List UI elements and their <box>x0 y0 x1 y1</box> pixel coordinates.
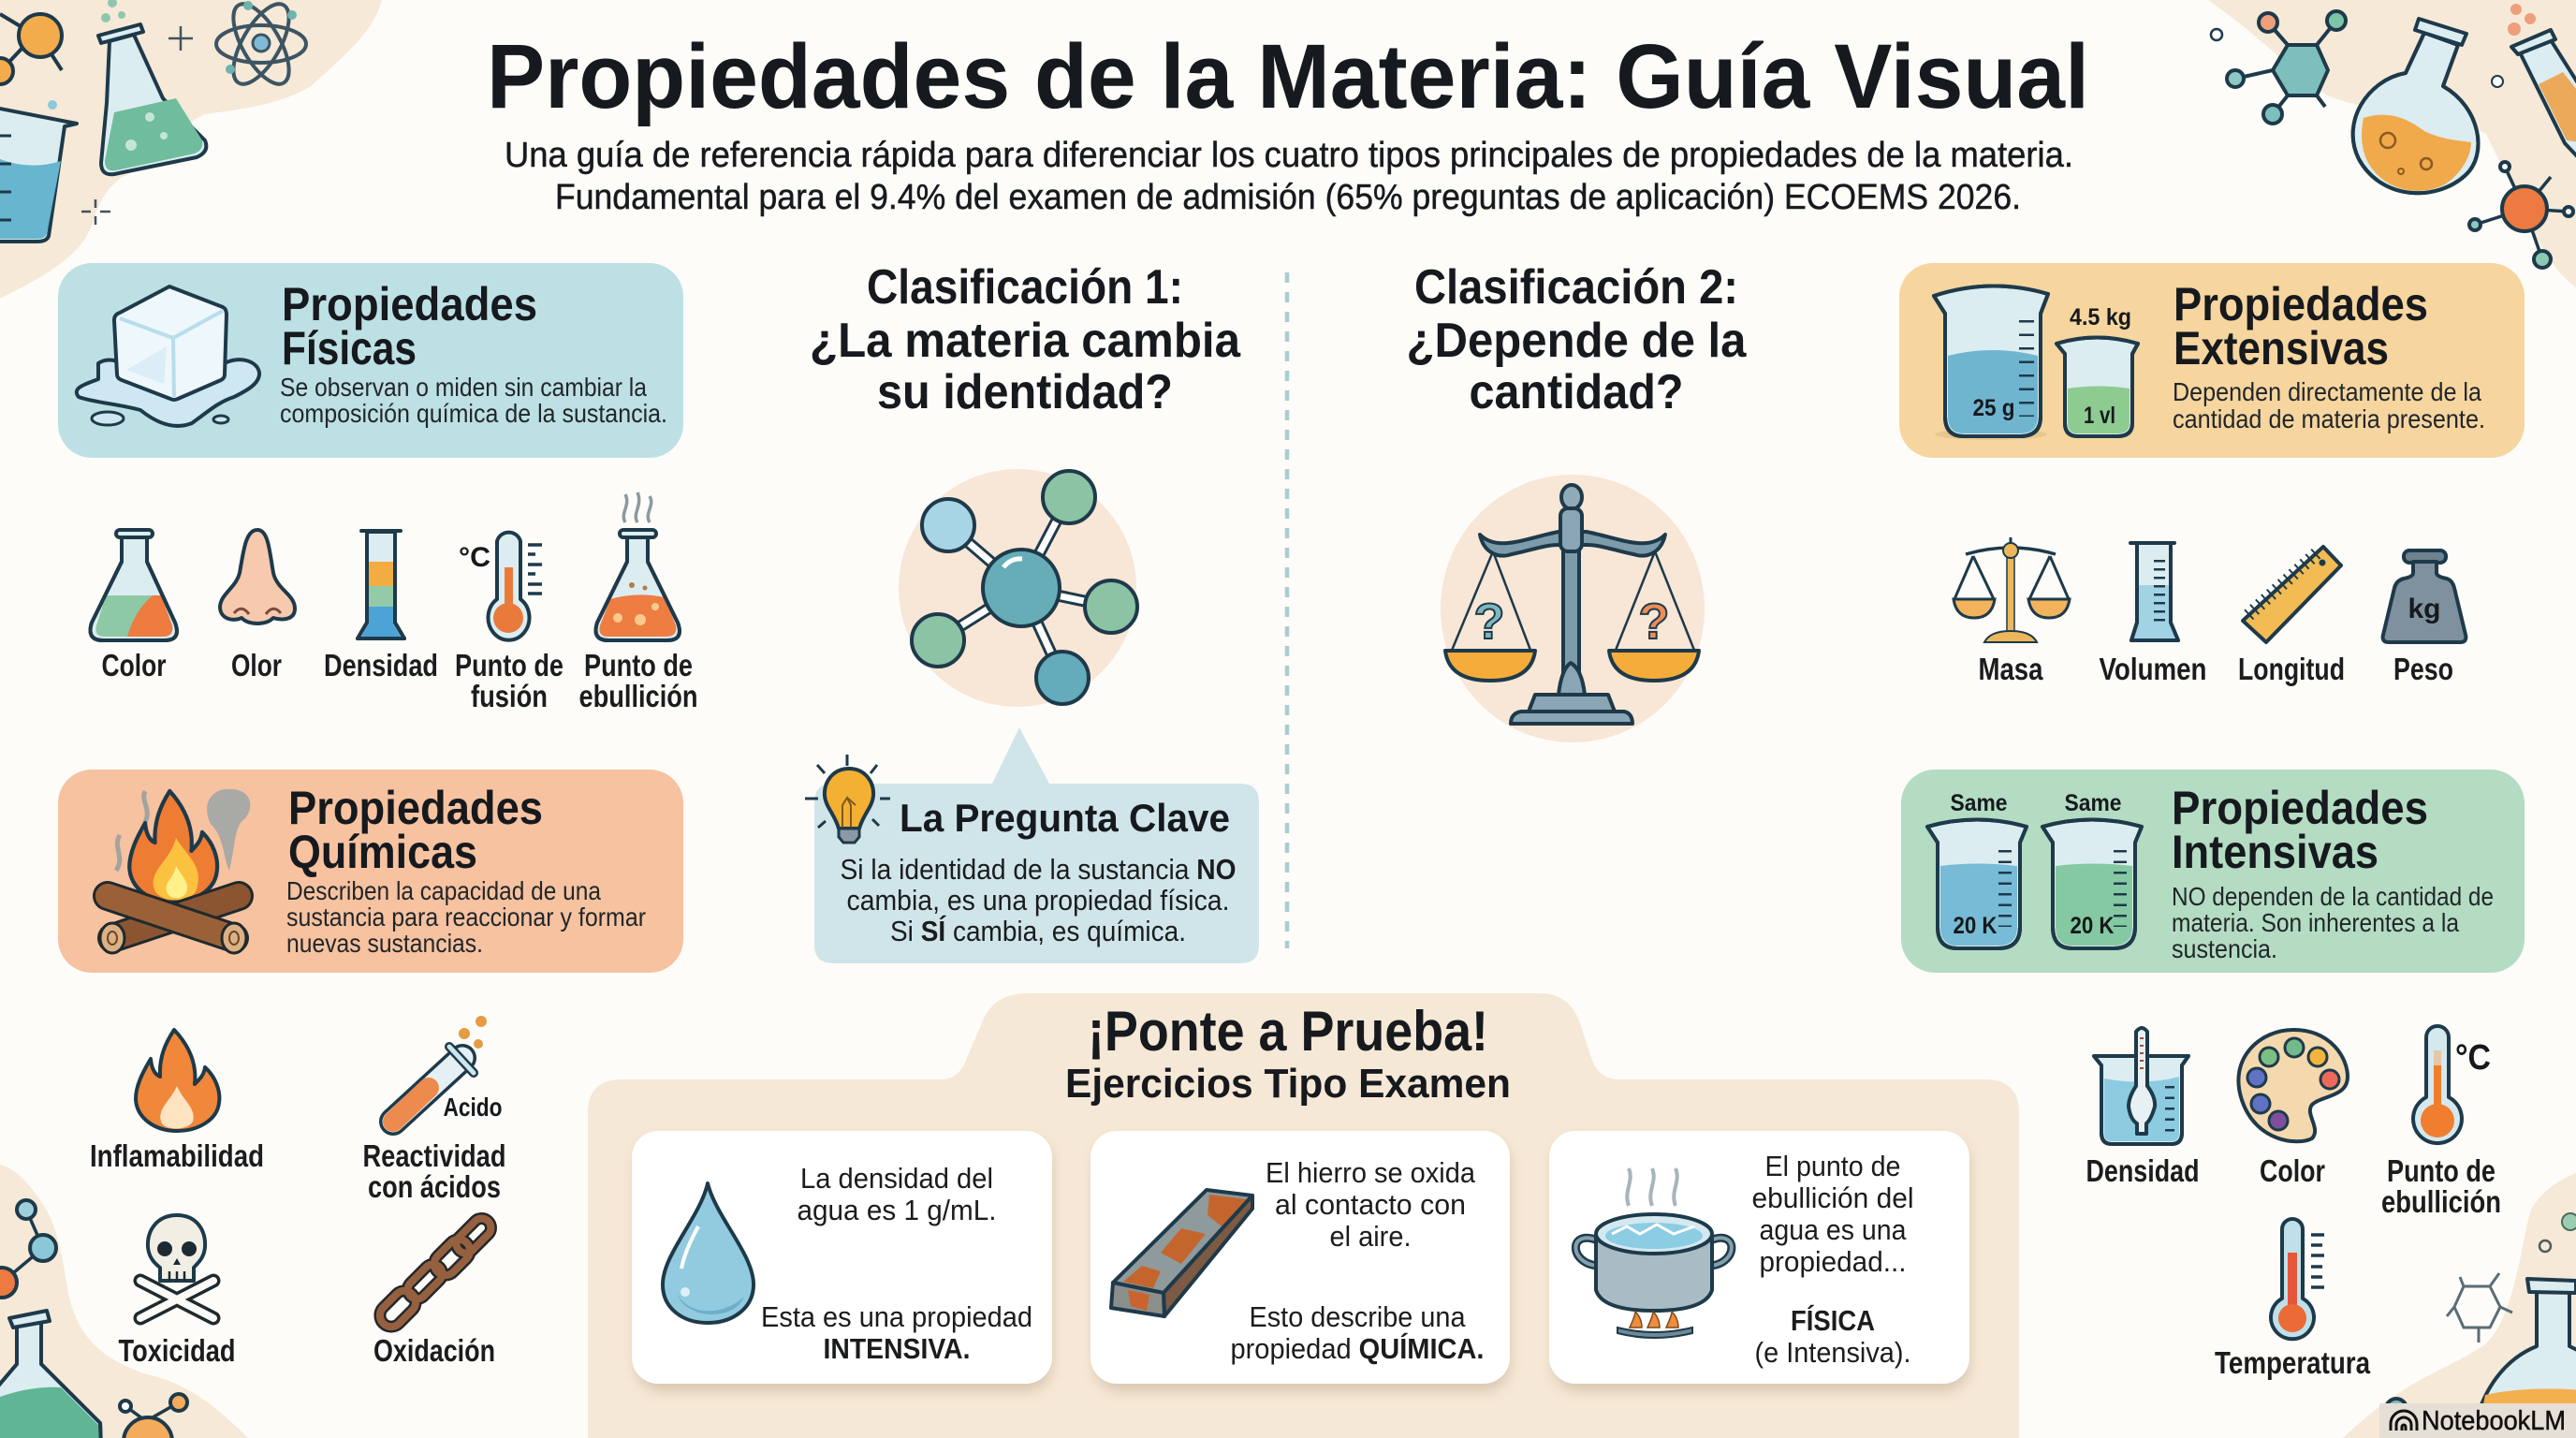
icon: melting point thermometer: Punto de <box>455 648 564 682</box>
icon: mass balance <box>1954 537 2070 686</box>
icon: kilogram weight: kg <box>2408 594 2441 624</box>
icon: color flask <box>90 530 177 682</box>
icon: two beakers at same temperature: Same <box>2065 790 2122 816</box>
card: densidad del agua <box>632 1131 1052 1391</box>
description: Dependen directamente de la <box>2173 377 2481 406</box>
icon: boiling point thermometer: Punto de <box>2387 1153 2496 1188</box>
chemical property examples <box>90 1016 505 1368</box>
classification 2 heading: ¿Depende de la <box>1406 314 1748 368</box>
callout text: Si la identidad de la sustancia NO <box>841 853 1236 886</box>
card: hierro oxidado: Esto describe una <box>1249 1300 1466 1333</box>
icon: melting point thermometer <box>455 533 564 713</box>
subtitle: Fundamental para el 9.4% del examen de admisión (65% preguntas de aplicación) ECOEMS 2026. <box>555 178 2021 217</box>
icon: two beakers at same temperature: Same <box>1951 790 2008 816</box>
description: sustencia. <box>2172 934 2277 963</box>
intensive property examples <box>2086 1026 2501 1380</box>
icon: kilogram weight: Peso <box>2393 652 2453 686</box>
icon: two beakers of different amounts: 1 vl <box>2084 403 2115 429</box>
icon: color flask: Color <box>101 648 167 682</box>
icon: two beakers at same temperature <box>1927 790 2142 948</box>
heading: Extensivas <box>2174 322 2389 374</box>
icon: balance scale: ? <box>1638 594 1670 650</box>
subtitle: Una guía de referencia rápida para diferenciar los cuatro tipos principales de propiedades de la materia. <box>505 136 2073 175</box>
icon: density cylinder <box>324 531 438 682</box>
heading <box>2172 782 2428 878</box>
icon: nose <box>220 530 295 682</box>
description: nuevas sustancias. <box>286 929 483 958</box>
heading: Propiedades <box>2174 278 2428 330</box>
card: densidad del agua: INTENSIVA. <box>824 1332 970 1365</box>
icon: two beakers of different amounts: 4.5 kg <box>2070 304 2131 330</box>
icon: melting point thermometer: °C <box>459 542 490 573</box>
description: Describen la capacidad de una <box>286 876 601 905</box>
card: densidad del agua: La densidad del <box>800 1162 993 1195</box>
icon: skull and crossbones: Toxicidad <box>118 1333 236 1368</box>
physical property examples <box>90 492 698 713</box>
heading: Propiedades <box>288 782 543 834</box>
icon: test tube with acid: con ácidos <box>368 1169 501 1204</box>
heading: Ejercicios Tipo Examen <box>1065 1061 1511 1107</box>
icon: boiling point thermometer: °C <box>2455 1038 2491 1078</box>
description: NO dependen de la cantidad de <box>2172 882 2494 911</box>
card: hierro oxidado: al contacto con <box>1275 1188 1466 1221</box>
description: cantidad de materia presente. <box>2173 404 2485 433</box>
icon: density hydrometer: Densidad <box>2086 1153 2200 1188</box>
description <box>286 876 646 958</box>
description: materia. Son inherentes a la <box>2172 908 2459 937</box>
icon: skull and crossbones <box>118 1215 236 1368</box>
icon: rusty chain: Oxidación <box>373 1333 495 1368</box>
extensive property examples <box>1954 537 2466 686</box>
decoration: bottom-left lab glassware <box>0 1200 187 1438</box>
watermark: NotebookLM: NotebookLM <box>2422 1406 2566 1436</box>
heading: Químicas <box>288 826 477 878</box>
card: punto de ebullición: agua es una <box>1760 1213 1907 1246</box>
panel: ponte a prueba <box>588 993 2019 1438</box>
decoration: bottom-right lab glassware <box>2386 1213 2576 1438</box>
callout: la pregunta clave <box>805 727 1259 963</box>
icon: rusty chain <box>373 1214 495 1368</box>
watermark: NotebookLM <box>2379 1403 2576 1438</box>
icon: density cylinder: Densidad <box>324 648 438 682</box>
icon: flame <box>90 1030 264 1173</box>
panel: propiedades extensivas <box>1899 263 2525 458</box>
icon: boiling flask: ebullición <box>578 679 698 713</box>
classification 1 heading: ¿La materia cambia <box>810 314 1241 368</box>
description: Se observan o miden sin cambiar la <box>280 373 647 402</box>
classification 2 heading <box>1406 260 1748 419</box>
subtitle <box>505 136 2073 217</box>
card: hierro oxidado: propiedad QUÍMICA. <box>1230 1332 1485 1365</box>
card: hierro oxidado: el aire. <box>1329 1220 1412 1253</box>
card: punto de ebullición <box>1549 1131 1969 1391</box>
heading <box>1065 1000 1511 1107</box>
icon: balance scale <box>1441 475 1705 742</box>
icon: two beakers of different amounts: 25 g <box>1973 395 2014 421</box>
description: composición química de la sustancia. <box>280 399 667 428</box>
title: Propiedades de la Materia: Guía Visual <box>487 25 2089 127</box>
card: punto de ebullición: FÍSICA <box>1791 1304 1875 1337</box>
decoration: top-left lab glassware <box>0 0 306 242</box>
icon: kilogram weight <box>2383 550 2466 686</box>
heading: Intensivas <box>2172 826 2378 878</box>
description: sustancia para reaccionar y formar <box>286 902 646 932</box>
icon: ruler: Longitud <box>2238 652 2345 686</box>
icon: balance scale: ? <box>1473 594 1505 650</box>
card: punto de ebullición: ebullición del <box>1752 1181 1913 1214</box>
icon: ruler <box>2238 547 2345 686</box>
icon: light bulb <box>805 755 890 843</box>
classification 1 heading: Clasificación 1: <box>867 260 1183 315</box>
classification 1 heading: su identidad? <box>877 365 1173 419</box>
icon: temperature thermometer: Temperatura <box>2215 1345 2371 1380</box>
icon: rusty iron bar <box>1111 1190 1252 1316</box>
description <box>280 373 667 428</box>
heading: Físicas <box>282 322 417 374</box>
icon: volume cylinder: Volumen <box>2099 652 2207 686</box>
icon: mass balance: Masa <box>1979 652 2043 686</box>
card: hierro oxidado: El hierro se oxida <box>1266 1156 1476 1189</box>
classification 2 heading: cantidad? <box>1470 365 1683 419</box>
heading <box>2174 278 2428 374</box>
icon: molecule <box>899 469 1137 707</box>
icon: nose: Olor <box>231 648 282 682</box>
card: punto de ebullición: El punto de <box>1765 1150 1900 1182</box>
icon: melting ice cube <box>77 286 259 426</box>
icon: flame: Inflamabilidad <box>90 1138 264 1173</box>
heading: Propiedades <box>282 278 537 330</box>
icon: campfire <box>100 789 250 953</box>
heading: Propiedades <box>2172 782 2428 834</box>
callout: la pregunta clave: La Pregunta Clave <box>900 796 1230 840</box>
icon: density hydrometer <box>2086 1028 2200 1188</box>
icon: two beakers at same temperature: 20 K <box>2071 913 2114 939</box>
icon: paint palette <box>2238 1030 2348 1188</box>
icon: volume cylinder <box>2099 543 2207 686</box>
icon: test tube with acid <box>363 1016 505 1204</box>
icon: melting point thermometer: fusión <box>471 679 548 713</box>
decoration: top-right lab glassware <box>2211 4 2576 268</box>
icon: test tube with acid: Reactividad <box>363 1138 505 1173</box>
icon: water drop <box>663 1183 754 1323</box>
card: punto de ebullición: (e Intensiva). <box>1754 1336 1911 1369</box>
panel: propiedades intensivas <box>1901 770 2525 973</box>
panel: propiedades químicas <box>58 770 683 973</box>
description <box>2172 882 2494 963</box>
heading <box>282 278 537 374</box>
icon: temperature thermometer <box>2215 1219 2371 1380</box>
icon: two beakers at same temperature: 20 K <box>1953 913 1998 939</box>
card: densidad del agua: Esta es una propiedad <box>761 1300 1032 1333</box>
classification 1 heading <box>810 260 1241 419</box>
heading <box>288 782 543 878</box>
icon: boiling pot <box>1575 1168 1732 1338</box>
icon: boiling flask <box>578 492 698 713</box>
card: densidad del agua: agua es 1 g/mL. <box>798 1194 996 1226</box>
icon: two beakers of different amounts <box>1934 286 2138 440</box>
card: punto de ebullición: propiedad... <box>1760 1245 1906 1278</box>
callout text: cambia, es una propiedad física. <box>846 884 1230 917</box>
card: hierro oxidado <box>1090 1131 1510 1391</box>
icon: test tube with acid: Acido <box>444 1093 502 1122</box>
icon: boiling point thermometer: ebullición <box>2381 1184 2501 1219</box>
classification 2 heading: Clasificación 2: <box>1414 260 1738 315</box>
description <box>2173 377 2485 433</box>
callout text <box>841 853 1236 947</box>
panel: propiedades físicas <box>58 263 683 458</box>
icon: boiling point thermometer <box>2381 1026 2501 1219</box>
heading: ¡Ponte a Prueba! <box>1088 1000 1488 1063</box>
icon: paint palette: Color <box>2260 1153 2325 1188</box>
icon: boiling flask: Punto de <box>584 648 693 682</box>
callout text: Si SÍ cambia, es química. <box>890 915 1186 947</box>
